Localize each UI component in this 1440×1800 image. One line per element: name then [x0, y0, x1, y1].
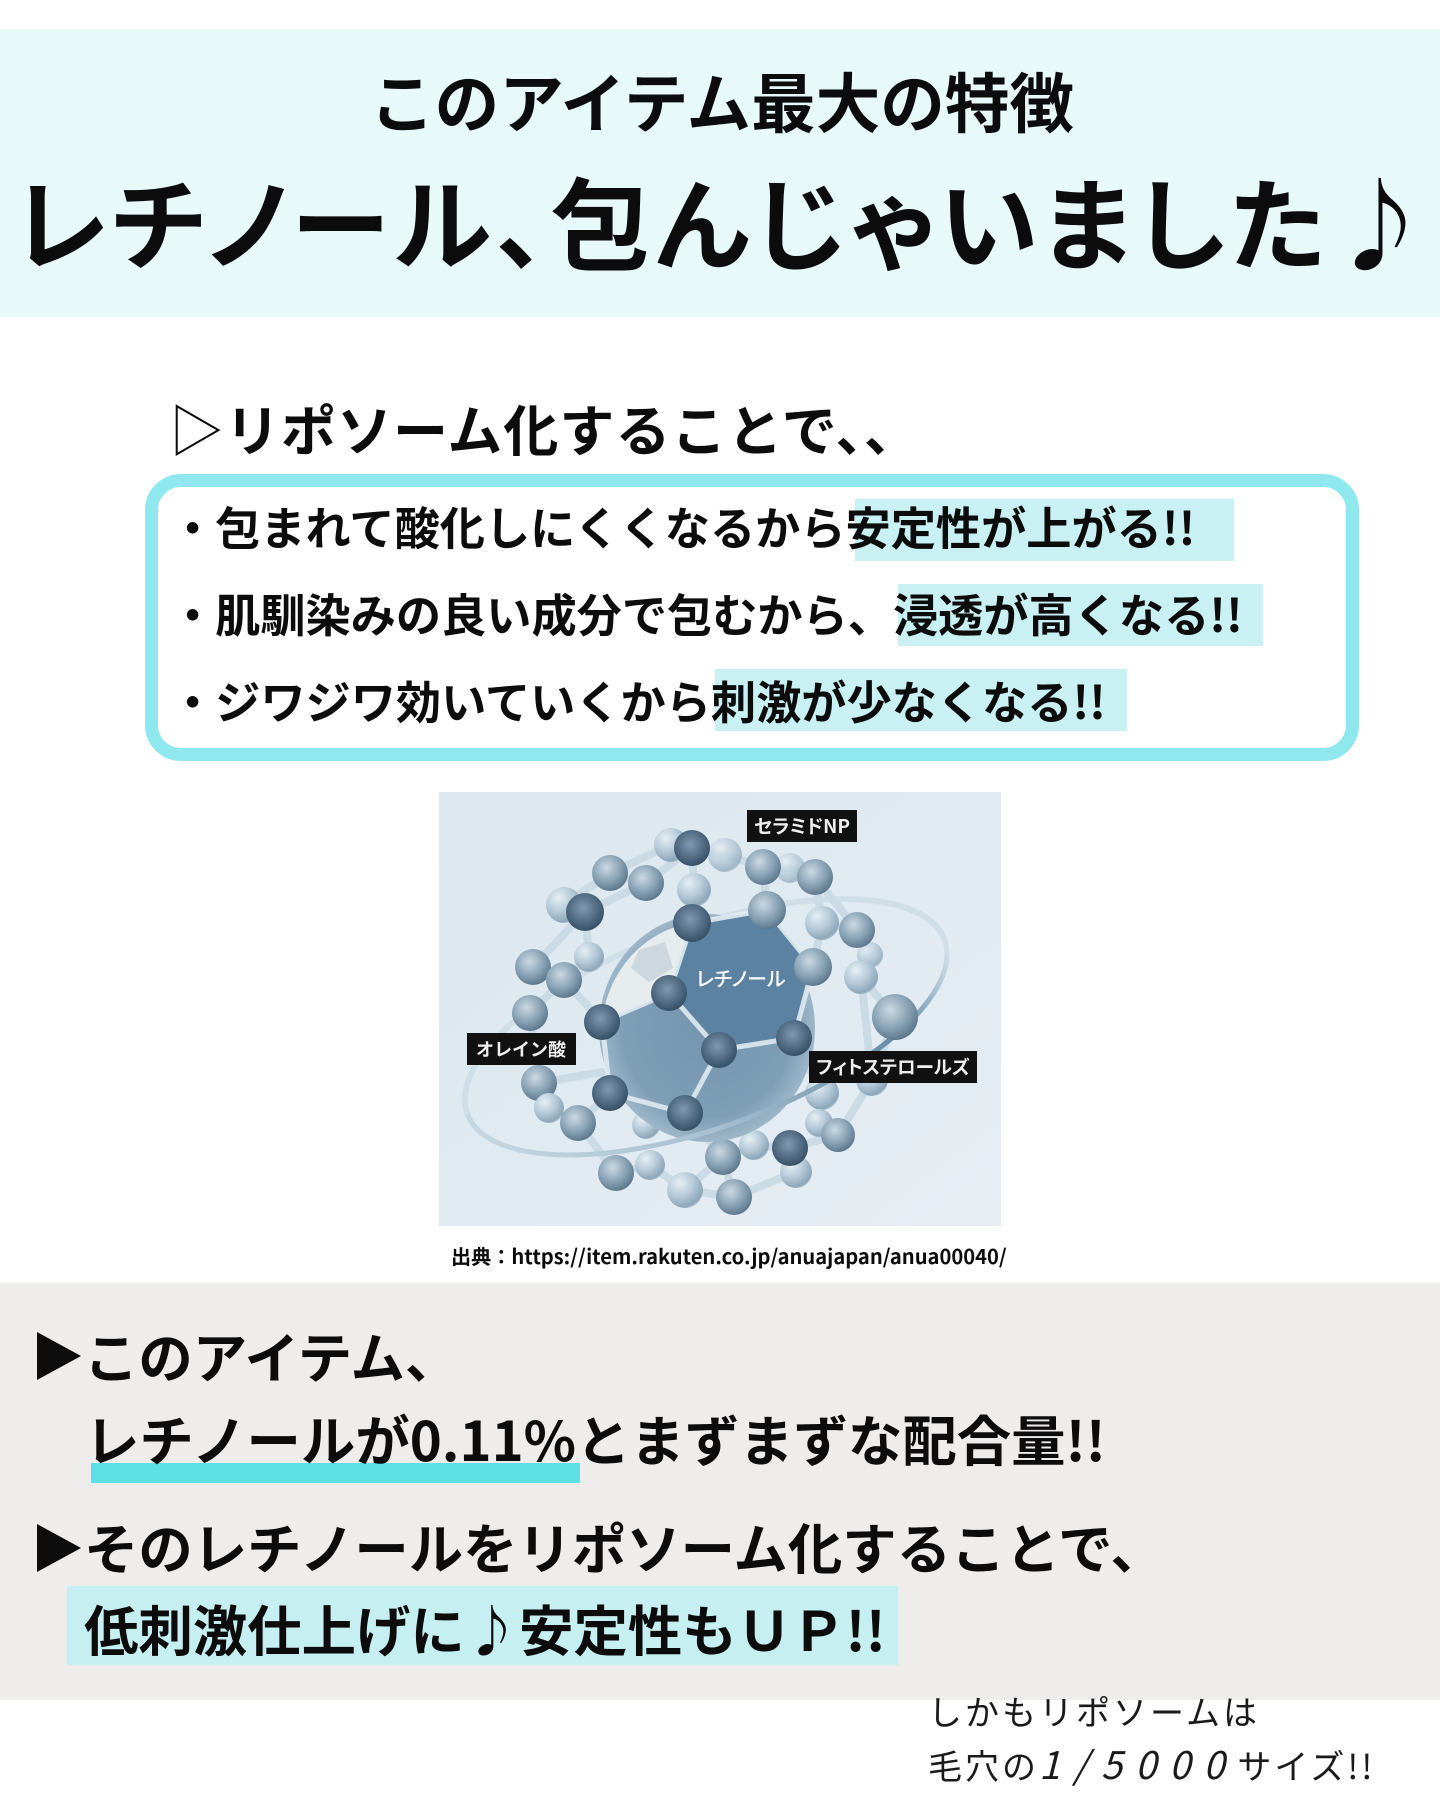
benefit 1: ・包まれて酸化しにくくなるから安定性が上がる!!: [170, 494, 1195, 559]
panel: liposome benefits: [145, 474, 1359, 761]
orbit ring: front: [467, 940, 979, 1208]
label: retinol: レチノール: [696, 963, 786, 992]
header eyebrow: このアイテム最大の特徴: [370, 52, 1074, 146]
handwritten note: [928, 1686, 1375, 1790]
highlight row 2: [898, 584, 1263, 646]
highlight row 1: [855, 499, 1234, 561]
label: ceramide: セラミドNP: [754, 812, 850, 839]
panel: summary: [0, 1283, 1440, 1700]
benefit 3: ・ジワジワ効いていくから刺激が少なくなる!!: [170, 668, 1106, 733]
label: phytosterols: フィトステロールズ: [816, 1054, 970, 1080]
image source caption: 出典：https://item.rakuten.co.jp/anuajapan/anua00040/: [451, 1241, 1007, 1270]
arrow 2: [37, 1524, 81, 1572]
summary line 2: レチノールが0.11%とまずまずな配合量!!: [85, 1398, 1106, 1477]
highlight row 3: [715, 669, 1127, 731]
header band: [0, 29, 1440, 317]
summary line 1: このアイテム、: [84, 1315, 459, 1394]
retinol core sphere: [599, 910, 815, 1142]
summary line 4: 低刺激仕上げに♪安定性もＵＰ!!: [84, 1588, 886, 1667]
summary line 3: そのレチノールをリポソーム化することで、: [84, 1506, 1165, 1585]
handwritten note: 毛穴の1/5000サイズ!!: [928, 1735, 1375, 1790]
big atom: [872, 994, 918, 1040]
orbit ring: back: [433, 846, 945, 1114]
benefit 2: ・肌馴染みの良い成分で包むから、浸透が高くなる!!: [170, 581, 1243, 646]
image background: [439, 792, 1001, 1226]
label: oleic acid: オレイン酸: [476, 1036, 566, 1062]
back atoms: [512, 828, 888, 1215]
underline accent: [91, 1463, 580, 1483]
front atoms: [566, 830, 875, 1166]
highlight: low irritation: [67, 1586, 898, 1665]
subheading: liposome: ▷リポソーム化することで、、: [169, 387, 920, 467]
back bonds: [530, 845, 895, 1197]
arrow 1: [37, 1332, 81, 1380]
label: oleic acid: [467, 1033, 576, 1065]
chart: liposome molecule image: [439, 792, 1001, 1226]
handwritten note: しかもリポソームは: [928, 1686, 1260, 1735]
front bonds: [602, 910, 813, 1113]
main title: レチノール、包んじゃいました♪: [14, 146, 1434, 291]
